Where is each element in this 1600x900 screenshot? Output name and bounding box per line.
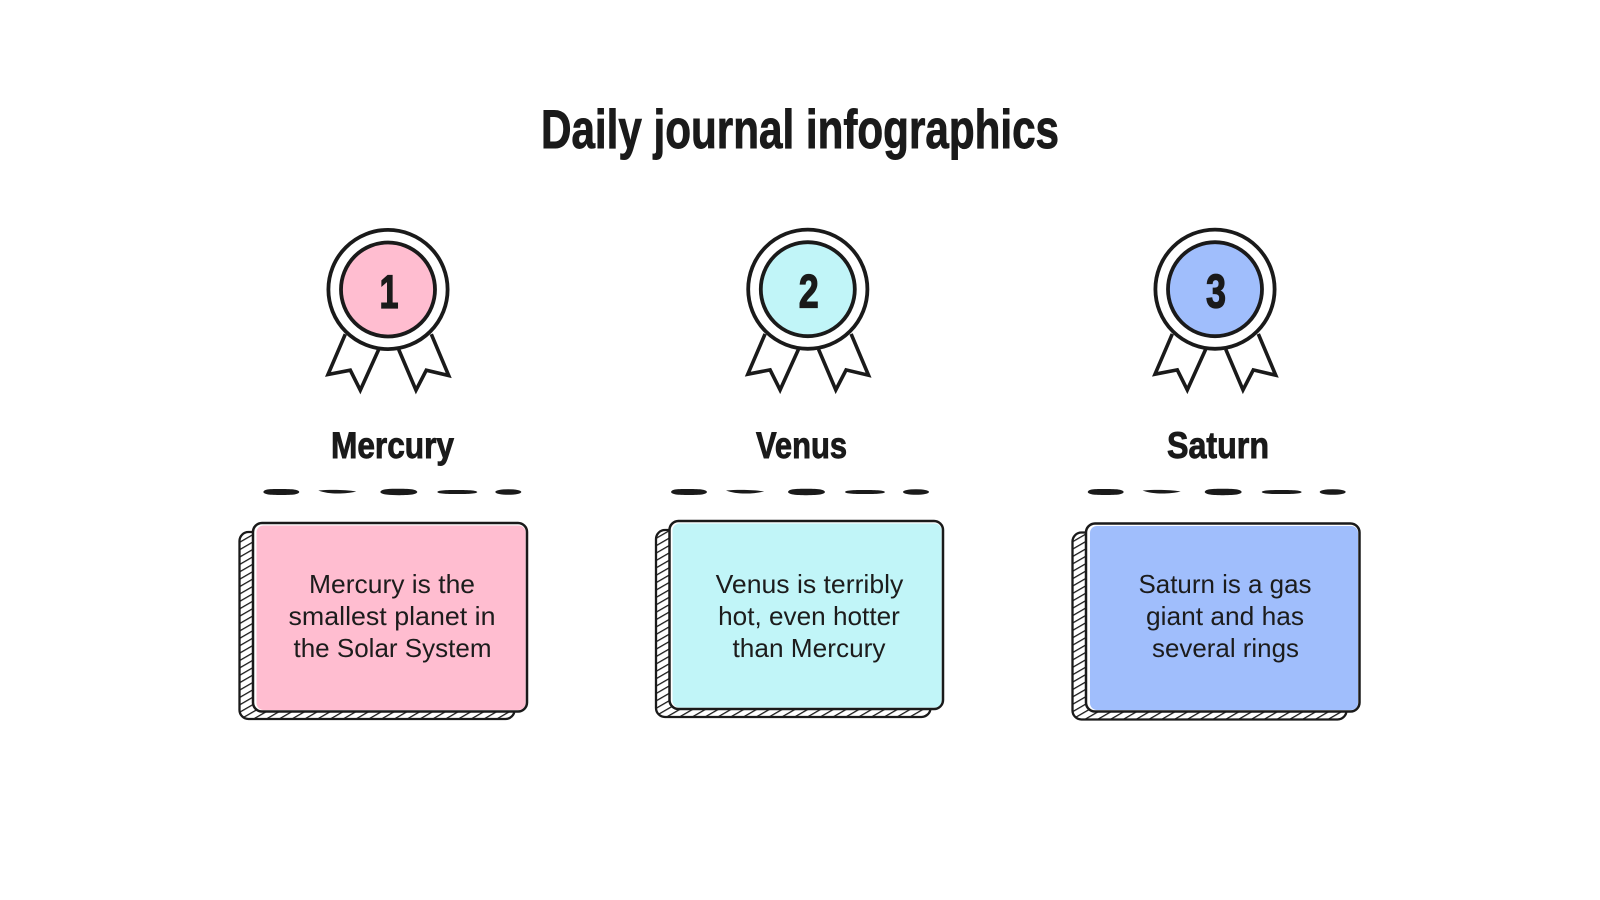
card: Mercury description	[240, 523, 527, 719]
card: Venus description	[656, 521, 943, 717]
panel: Mercury	[240, 230, 527, 719]
dashed divider	[263, 489, 521, 495]
heading: Venus: Venus	[756, 425, 847, 466]
dashed divider	[1088, 489, 1346, 495]
card: Saturn description	[1072, 524, 1360, 720]
card: Mercury description: the Solar System	[294, 633, 492, 663]
heading: Mercury: Mercury	[331, 425, 454, 466]
icon: medal 3	[1155, 230, 1276, 390]
panel: Saturn	[1072, 230, 1360, 720]
heading: Saturn: Saturn	[1167, 425, 1269, 466]
card: Saturn description: Saturn is a gas	[1138, 569, 1312, 599]
card: Saturn description: several rings	[1152, 633, 1299, 663]
card: Mercury description: smallest planet in	[288, 601, 496, 631]
icon: medal 1: 1	[380, 265, 398, 318]
icon: medal 1	[328, 230, 449, 390]
card: Venus description: than Mercury	[732, 633, 886, 663]
icon: medal 3: 3	[1206, 265, 1226, 318]
icon: medal 2	[748, 230, 868, 390]
card: Venus description: Venus is terribly	[716, 569, 903, 599]
card: Venus description: hot, even hotter	[718, 601, 900, 631]
icon: medal 2: 2	[799, 265, 819, 318]
card: Saturn description: giant and has	[1146, 601, 1304, 631]
card: Mercury description: Mercury is the	[309, 569, 475, 599]
dashed divider	[671, 489, 929, 495]
title: Daily journal infographics	[541, 98, 1059, 160]
panel: Venus	[656, 230, 943, 717]
